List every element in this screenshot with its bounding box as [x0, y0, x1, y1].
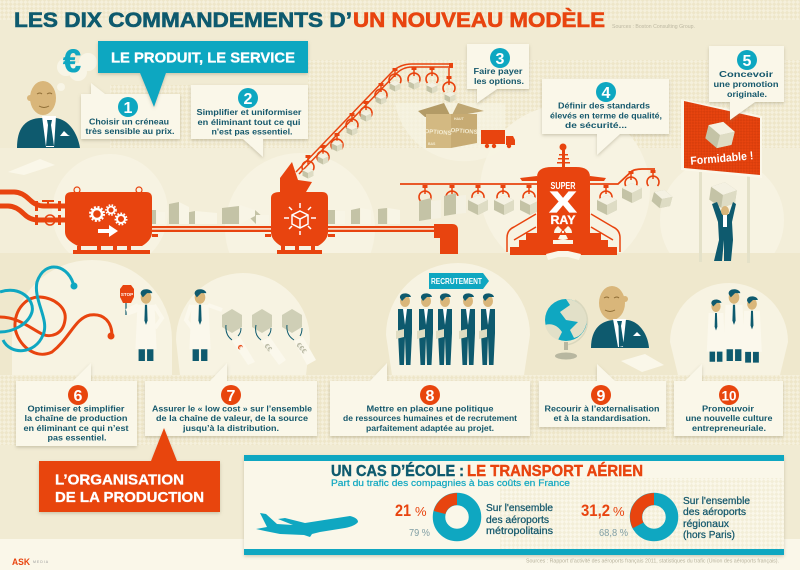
donut 2 label: (hors Paris): [683, 530, 735, 541]
machine 2 with cube icon: [265, 162, 335, 254]
title: [14, 9, 605, 32]
panel heading: LE TRANSPORT AÉRIEN: [467, 463, 643, 480]
doctor with stop sign: [120, 285, 162, 361]
bubble 2: 2: [244, 91, 253, 108]
bubble 3: [467, 44, 529, 103]
bubble 10: Promouvoir: [702, 404, 755, 414]
bubble 10: [674, 364, 783, 436]
title: UN NOUVEAU MODÈLE: [353, 9, 605, 32]
man lifting cube: [708, 180, 738, 261]
doctor with nuts and price tags: €: [235, 344, 243, 351]
icon: plane: [256, 513, 358, 537]
doctor with nuts and price tags: €€€: [294, 342, 307, 355]
donut 2 label: [683, 496, 750, 541]
doctor with nuts and price tags: [186, 289, 316, 365]
bubble 5: une promotion: [714, 79, 778, 89]
options cardboard box: OPTIONS: [424, 129, 452, 137]
bubble 8: 8: [426, 388, 435, 405]
stat: 21 percent: 79 %: [409, 528, 430, 539]
bubble 9: et à la standardisation.: [554, 413, 650, 423]
donut 1 label: [486, 503, 553, 537]
bubble 7: 7: [227, 388, 236, 405]
second rail with claws and cubes: [400, 169, 674, 221]
banner: l'organisation de la production: DE LA PRODUCTION: [55, 489, 204, 506]
bubble 4: [542, 79, 669, 155]
doctor with stop sign: STOP: [121, 292, 133, 297]
title: LES DIX COMMANDEMENTS D’: [14, 9, 352, 32]
products on conveyor: [152, 202, 400, 224]
panel heading: UN CAS D’ÉCOLE :: [331, 463, 464, 480]
bubble 5: originale.: [727, 89, 767, 99]
globe: [545, 299, 587, 360]
options cardboard box: OPTIONS: [450, 128, 478, 136]
bubble 1: très sensible au prix.: [86, 126, 174, 136]
donut chart 1: [434, 493, 475, 535]
banner: l'organisation de la production: L’ORGANISATION: [55, 472, 184, 488]
bubble 8: parfaitement adaptée au projet.: [366, 423, 494, 433]
overhead rail with claws: [296, 63, 456, 178]
bubble 2: en éliminant tout ce qui: [198, 117, 300, 127]
donut 2 label: régionaux: [683, 519, 729, 530]
super x ray machine: [507, 144, 620, 260]
bubble 8: [330, 363, 530, 436]
stat: 31,2 percent: 31,2: [581, 501, 610, 520]
recruitment sign: [429, 273, 489, 289]
truck: [481, 130, 515, 148]
bubble 2: [191, 85, 308, 157]
stat: 31,2 percent: %: [613, 504, 625, 519]
stat: 21 percent: [395, 501, 430, 539]
bubble 6: la chaîne de production: [24, 413, 128, 423]
bubble 5: Concevoir: [719, 69, 774, 79]
bubble 6: en éliminant ce qui n’est: [24, 423, 129, 433]
bubble 8: Mettre en place une politique: [366, 404, 494, 414]
man with suit, top left: [8, 81, 80, 175]
bubble 8: de ressources humaines et de recrutement: [343, 413, 517, 423]
doctor with nuts and price tags: €€: [262, 343, 273, 353]
bubble 1: Choisir un créneau: [89, 116, 169, 126]
bubble 1: 1: [124, 100, 133, 117]
logo ask media: [12, 557, 49, 567]
logo ask media: ASK: [12, 557, 30, 567]
bubble 4: de sécurité...: [565, 120, 627, 130]
bubble 6: Optimiser et simplifier: [28, 404, 125, 414]
bubble 3: Faire payer: [474, 66, 523, 76]
formidable sign: [681, 99, 762, 263]
bubble 6: pas essentiel.: [48, 432, 106, 442]
bubble 4: élevés en terme de qualité,: [550, 110, 662, 120]
donut 2 label: des aéroports: [683, 507, 746, 518]
donut 1 label: Sur l'ensemble: [486, 503, 553, 514]
bubble 10: entrepreneuriale.: [692, 423, 766, 433]
man with suit, externalisation: [591, 286, 664, 372]
bubble 2: n'est pas essentiel.: [212, 126, 292, 136]
super x ray machine: SUPER: [550, 180, 576, 192]
sources top: Sources : Boston Consulting Group.: [612, 24, 695, 30]
tangled ropes: [0, 267, 114, 354]
panel subtitle: Part du trafic des compagnies à bas coûts en France: [331, 478, 570, 489]
bubble 9: [539, 364, 666, 427]
banner: l'organisation de la production: [39, 428, 220, 512]
super x ray machine: RAY: [550, 215, 576, 227]
bubble 2: Simplifier et uniformiser: [196, 107, 302, 117]
logo ask media: MEDIA: [33, 560, 49, 564]
super x ray machine: X: [550, 187, 577, 219]
bubble 10: une nouvelle culture: [686, 413, 773, 423]
panel: un cas d'ecole: [244, 455, 784, 555]
pipes and valves: [0, 192, 66, 225]
options cardboard box: HAUT: [454, 117, 465, 121]
banner: le produit, le service: LE PRODUIT, LE SERVICE: [111, 50, 295, 66]
trio of entrepreneurs: [707, 289, 762, 363]
bubble 4: 4: [602, 85, 611, 102]
bubble 10: 10: [722, 388, 737, 404]
thought bubble with euro: €: [63, 43, 81, 79]
bubble 6: 6: [74, 388, 83, 405]
options cardboard box: [418, 103, 484, 148]
stat: 31,2 percent: 68,8 %: [599, 528, 628, 539]
bubble 7: jusqu’à la distribution.: [182, 423, 279, 433]
conveyors: [152, 224, 458, 254]
bubble 9: Recourir à l’externalisation: [544, 404, 660, 414]
bubble 7: Assurer le « low cost » sur l’ensemble: [152, 404, 312, 414]
stat: 21 percent: 21: [395, 501, 411, 520]
bubble 5: [709, 46, 784, 120]
stat: 21 percent: %: [415, 504, 427, 519]
stat: 31,2 percent: [581, 501, 628, 539]
bubble 7: [145, 363, 317, 436]
donut chart 2: [630, 493, 672, 535]
bubble 1: [81, 83, 180, 139]
recruitment sign: RECRUTEMENT: [431, 277, 482, 286]
donut 1 label: métropolitains: [486, 526, 553, 537]
bubble 9: 9: [597, 388, 606, 405]
bubble 4: Définir des standards: [558, 100, 650, 110]
banner: le produit, le service: [98, 41, 308, 107]
machine 1 with gears: [65, 187, 158, 254]
bubble 3: les options.: [474, 76, 524, 86]
row of candidates: [396, 293, 495, 365]
options cardboard box: BAS: [428, 142, 436, 146]
donut 1 label: des aéroports: [486, 515, 549, 526]
panel heading: [331, 463, 643, 480]
donut 2 label: Sur l'ensemble: [683, 496, 750, 507]
thought bubble with euro: [57, 43, 97, 91]
bubble 3: 3: [496, 51, 505, 68]
sources bottom: Sources : Rapport d’activité des aéroports français 2011, statistiques du trafic (Union des aéroports français).: [526, 558, 779, 564]
formidable sign: Formidable !: [690, 150, 754, 168]
bubble 5: 5: [743, 53, 752, 70]
bubble 6: [16, 363, 137, 446]
bubble 7: de la chaîne de valeur, de la source: [156, 413, 308, 423]
